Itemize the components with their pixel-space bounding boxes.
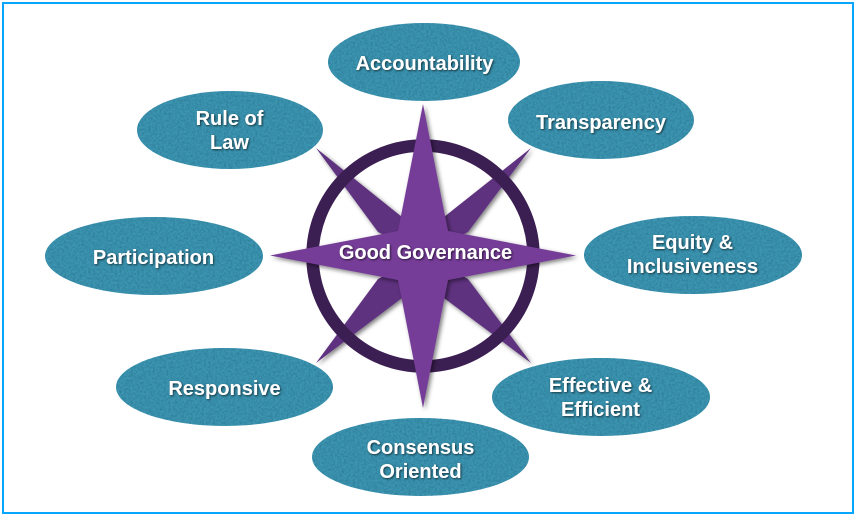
node: Rule of Law: Law	[210, 132, 249, 154]
diagonal star points	[316, 148, 531, 363]
node: Equity & Inclusiveness: Equity &	[652, 232, 733, 254]
node: Participation	[45, 217, 263, 295]
main four-point star	[270, 104, 576, 408]
node: Transparency: Transparency	[536, 112, 667, 134]
node: Consensus Oriented: Consensus	[367, 437, 474, 459]
node: Responsive: Responsive	[168, 378, 281, 400]
node: Participation: Participation	[93, 247, 214, 269]
node: Effective & Efficient: Effective &	[549, 375, 652, 397]
node: Rule of Law	[137, 91, 323, 169]
compass graphic	[270, 104, 576, 408]
node: Effective & Efficient	[492, 358, 710, 436]
node: Consensus Oriented: Oriented	[379, 461, 462, 483]
node: Accountability	[328, 23, 520, 101]
node: Accountability: Accountability	[356, 53, 494, 75]
node: Equity & Inclusiveness	[584, 216, 802, 294]
ring	[312, 146, 534, 366]
node: Equity & Inclusiveness: Inclusiveness	[627, 256, 758, 278]
center label: Good Governance	[339, 242, 512, 264]
node: Rule of Law: Rule of	[196, 108, 264, 130]
node: Effective & Efficient: Efficient	[561, 399, 640, 421]
node: Consensus Oriented	[312, 418, 529, 496]
node: Responsive	[116, 348, 333, 426]
node: Transparency	[508, 81, 694, 159]
